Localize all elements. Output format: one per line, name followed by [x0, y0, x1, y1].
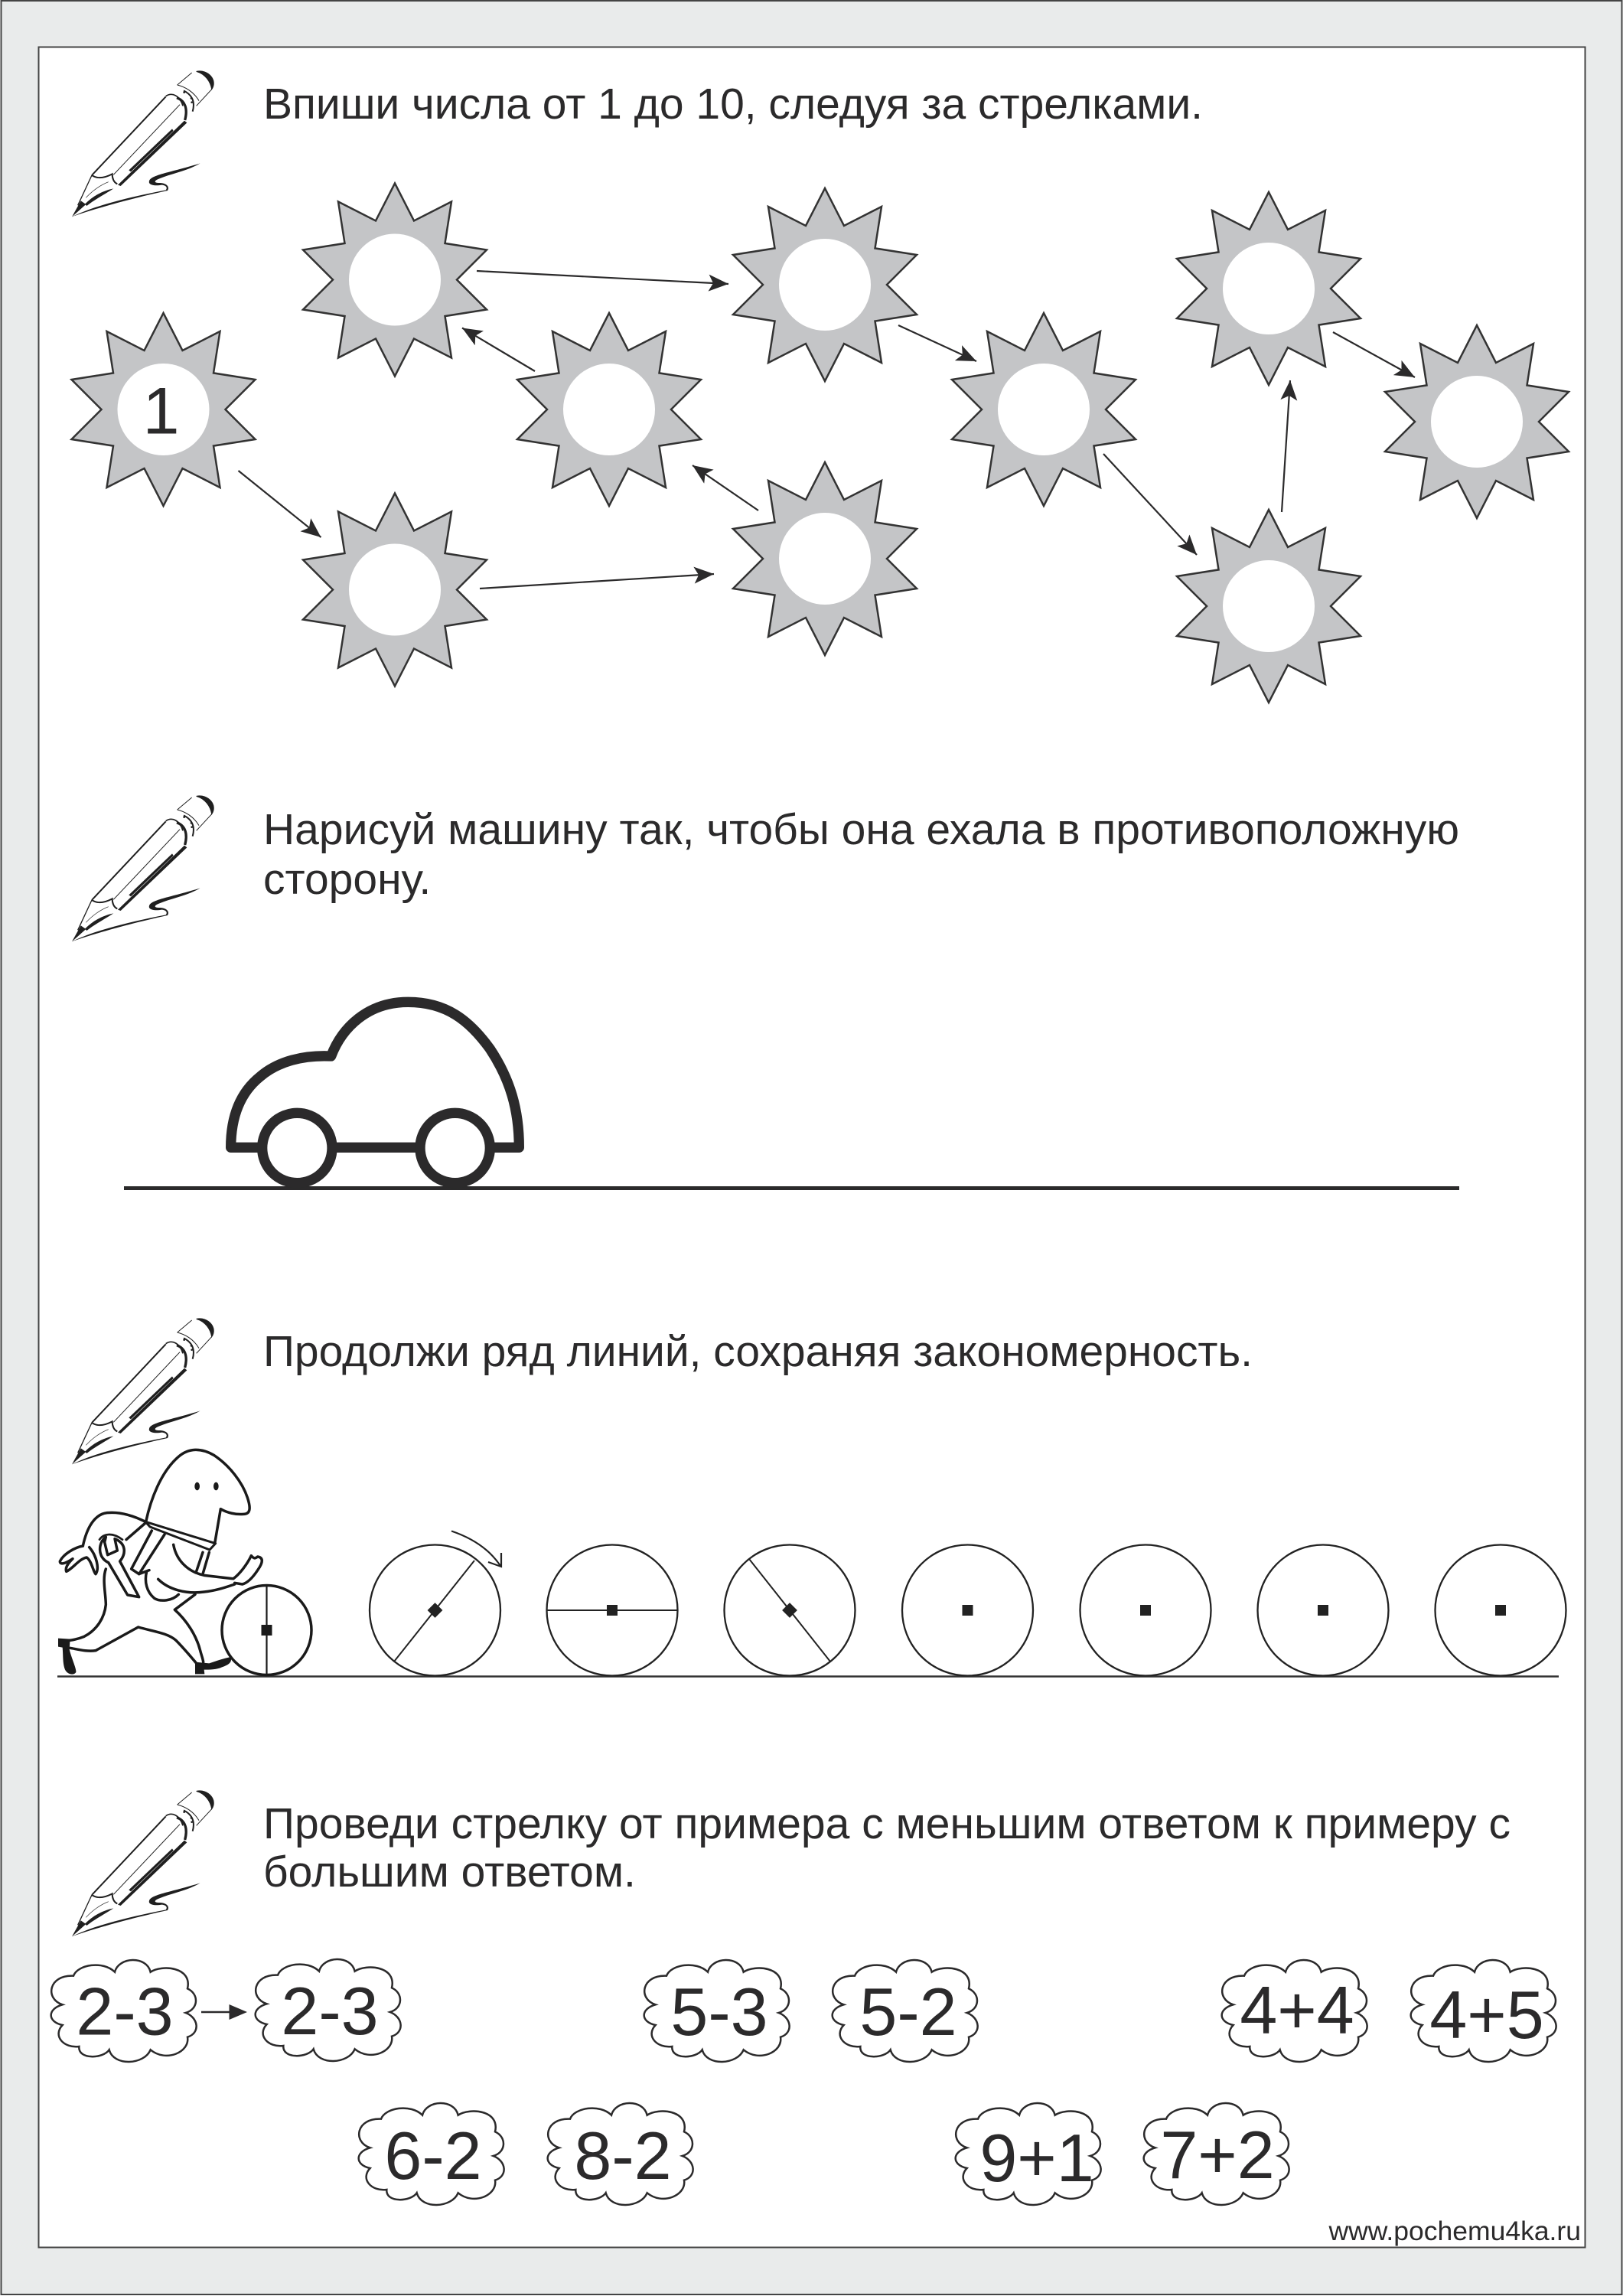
wheel 6	[1258, 1544, 1388, 1676]
ground line	[57, 1675, 1559, 1678]
small wheel	[222, 1586, 311, 1675]
icon: pencil	[72, 1319, 213, 1464]
section 1: number the suns	[72, 71, 1569, 703]
wheel 3	[724, 1544, 855, 1676]
cloud: 8-2	[548, 2103, 693, 2205]
cloud: 7+2: 7+2	[1160, 2117, 1275, 2193]
sun 5	[733, 188, 917, 381]
car drawing	[231, 1002, 519, 1183]
cloud: 5-3	[644, 1960, 790, 2062]
sun 8	[1177, 192, 1361, 385]
cloud: 6-2	[359, 2103, 504, 2205]
cloud: 5-2	[833, 1960, 978, 2062]
section 2: draw the car	[72, 796, 1459, 1188]
cloud: 2-3 right	[256, 1959, 401, 2061]
sun 1	[72, 313, 256, 506]
icon: pencil	[72, 796, 213, 941]
sun 10	[1385, 325, 1569, 518]
section 4: compare expressions	[51, 1791, 1556, 2205]
cloud: 4+5: 4+5	[1429, 1977, 1544, 2053]
example arrow	[201, 2004, 247, 2020]
cloud: 4+4: 4+4	[1240, 1972, 1354, 2048]
icon: pencil	[72, 71, 213, 217]
sun 2	[303, 184, 487, 377]
cloud: 5-2: 5-2	[859, 1974, 957, 2050]
heading: task 2: Нарисуй машину так, чтобы она ехала в противоположную	[263, 805, 1459, 854]
sun 4	[517, 313, 701, 506]
sun 9	[1177, 510, 1361, 703]
cloud: 4+4	[1222, 1960, 1367, 2062]
heading: task 2: сторону.	[263, 855, 431, 904]
cloud: 8-2: 8-2	[574, 2118, 672, 2193]
cloud: 7+2	[1144, 2103, 1289, 2205]
cloud: 5-3: 5-3	[670, 1974, 768, 2050]
arrows between suns	[239, 271, 1415, 589]
heading: task 1: Впиши числа от 1 до 10, следуя за стрелками.	[263, 80, 1203, 129]
sun 1: 1	[143, 375, 179, 448]
wheel 7	[1436, 1544, 1566, 1676]
cloud: 9+1	[956, 2103, 1101, 2205]
wheel 5	[1080, 1544, 1211, 1676]
ground line	[124, 1186, 1459, 1190]
cloud: 2-3 left: 2-3	[76, 1973, 174, 2050]
cloud: 2-3 right: 2-3	[281, 1973, 379, 2049]
section 3: continue the wheel series	[57, 1319, 1566, 1676]
heading: task 4: большим ответом.	[263, 1848, 636, 1896]
sun 7	[952, 313, 1136, 506]
cloud: 6-2: 6-2	[384, 2118, 482, 2193]
wheel 1 with rotation arrow	[370, 1531, 501, 1676]
heading: task 3: Продолжи ряд линий, сохраняя закономерность.	[263, 1327, 1253, 1376]
character pushing a wheel	[58, 1450, 262, 1675]
wheel 2	[546, 1544, 678, 1676]
icon: pencil	[72, 1791, 213, 1936]
sun 6	[733, 462, 917, 655]
wheel 4	[902, 1544, 1033, 1676]
cloud: 4+5	[1411, 1960, 1556, 2062]
website credit: www.pochemu4ka.ru	[1328, 2216, 1581, 2246]
cloud: 9+1: 9+1	[979, 2120, 1094, 2196]
cloud: 2-3 left	[51, 1960, 197, 2062]
heading: task 4: Проведи стрелку от примера с меньшим ответом к примеру с	[263, 1799, 1511, 1848]
sun 3	[303, 493, 487, 686]
